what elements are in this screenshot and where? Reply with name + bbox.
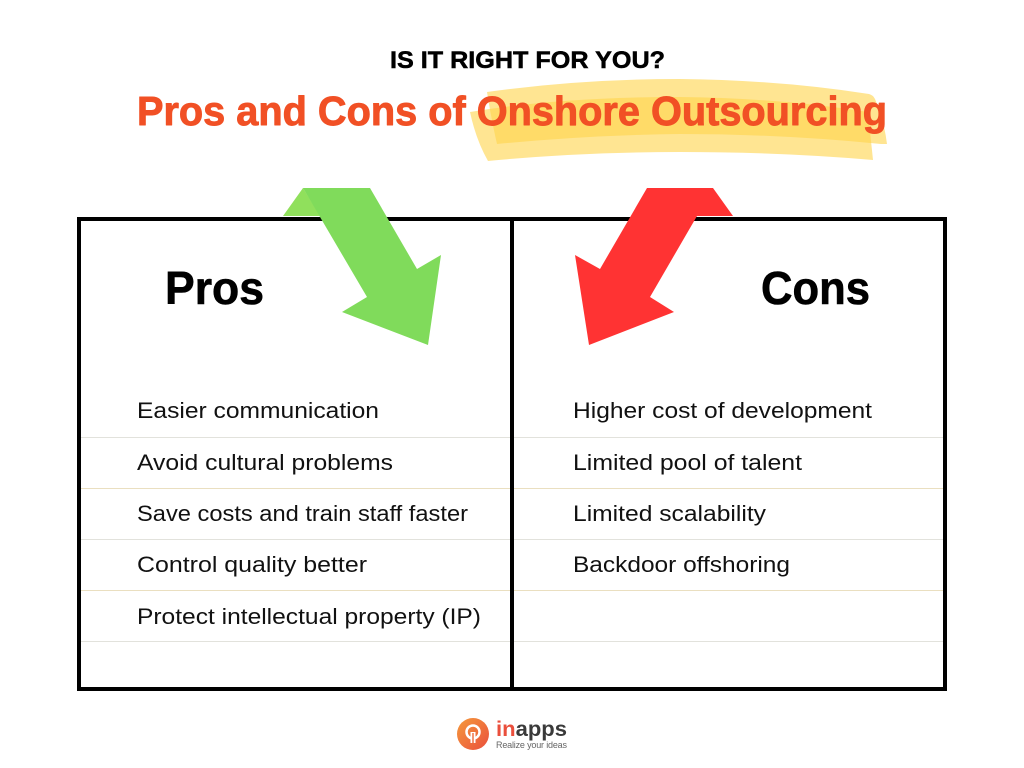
- arrow: red pointing into cons: [575, 188, 733, 345]
- heading: cons: Cons: [761, 262, 870, 314]
- logo: inapps: Realize your ideas: [496, 740, 568, 750]
- pros list: Avoid cultural problems: [137, 450, 393, 475]
- pros list: Protect intellectual property (IP): [137, 604, 481, 629]
- title highlight: [470, 79, 887, 161]
- eyebrow heading: IS IT RIGHT FOR YOU?: [390, 47, 665, 74]
- comparison table: [79, 219, 945, 689]
- heading: pros: Pros: [165, 262, 264, 314]
- pros list: Easier communication: [137, 398, 379, 423]
- cons list: Backdoor offshoring: [573, 552, 790, 577]
- cons list: Limited pool of talent: [573, 450, 802, 475]
- pros list: Control quality better: [137, 552, 367, 577]
- logo: inapps: inapps: [496, 718, 567, 741]
- main title: Pros and Cons of Onshore Outsourcing: [137, 88, 887, 134]
- logo: inapps: [457, 718, 568, 750]
- pros list: [137, 398, 481, 629]
- cons list: Higher cost of development: [573, 398, 872, 423]
- arrow: green pointing into pros: [283, 188, 441, 345]
- cons list: [573, 398, 872, 577]
- cons list: Limited scalability: [573, 501, 766, 526]
- pros list: Save costs and train staff faster: [137, 501, 468, 526]
